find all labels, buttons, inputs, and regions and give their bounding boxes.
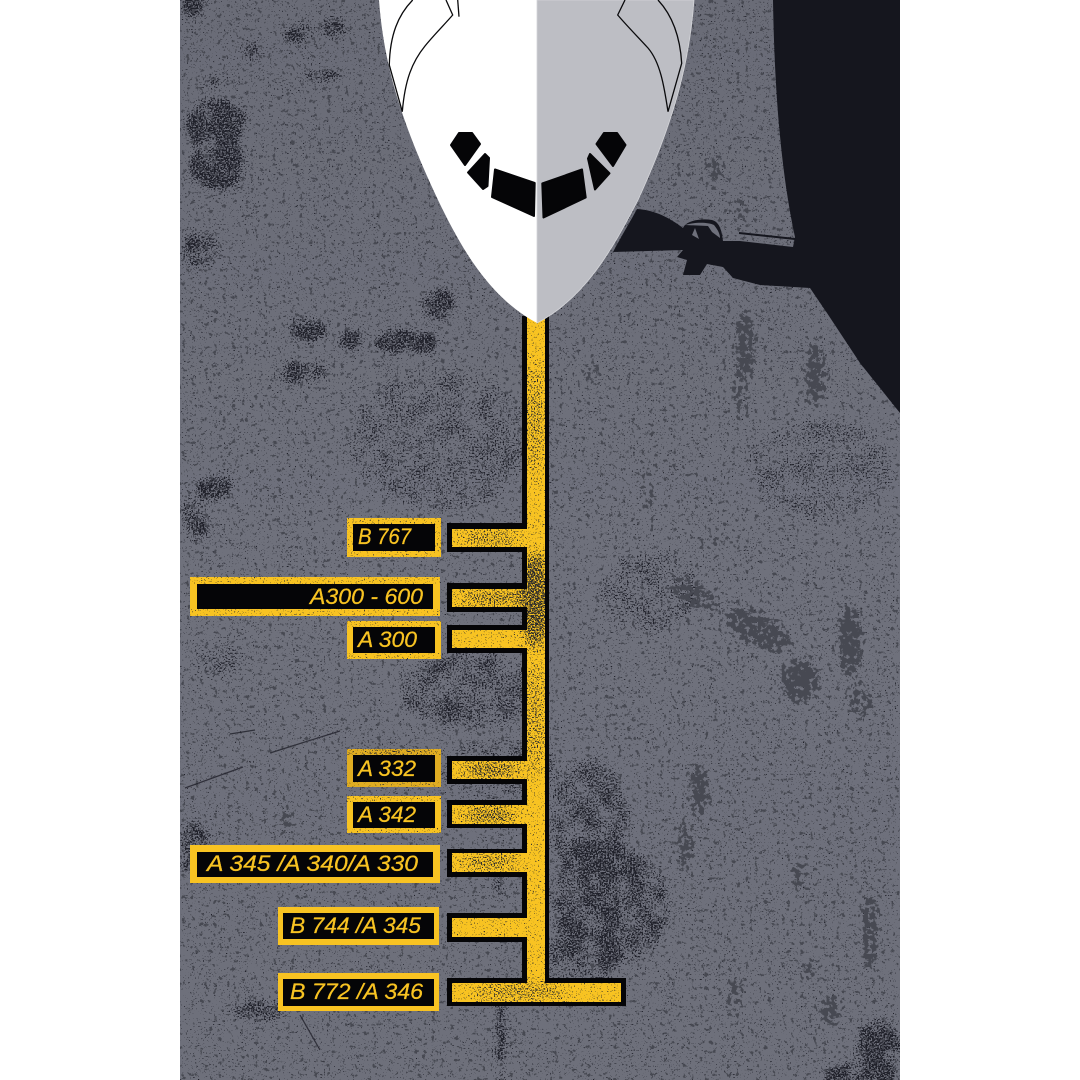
texture: dark grunge speckle (179, 0, 902, 1080)
label: A 300: A 300 (356, 627, 418, 652)
poster: aircraft nose and parking stop lines (180, 0, 900, 1080)
aircraft nose (379, 0, 694, 323)
label: A 342: A 342 (356, 802, 416, 827)
label: B 772 / A 346 (278, 973, 439, 1011)
nose: right outline panel (618, 0, 682, 112)
stop line: yellow centre and branches (452, 316, 621, 1002)
panel: asphalt background (180, 0, 900, 1080)
label: B 767: B 767 (358, 524, 412, 549)
label: A300 - 600: A300 - 600 (308, 584, 424, 609)
texture: gray asphalt stains (283, 154, 877, 1024)
label: A 332: A 332 (356, 756, 416, 781)
label: A 345 / A 340 / A 330 (190, 845, 440, 883)
label: A300 - 600 (190, 577, 440, 616)
cockpit windows: left (451, 133, 535, 216)
label: A 332 (347, 749, 441, 787)
label: A 300 (347, 621, 441, 659)
texture: worn paint on stop line (190, 318, 620, 1002)
label: A 345 / A 340 / A 330: A 345 /A 340/A 330 (205, 851, 419, 876)
label: B 744 / A 345: B 744 /A 345 (290, 913, 422, 938)
label: B 767 (347, 518, 441, 557)
scratches on the asphalt (185, 730, 340, 1050)
cockpit windows: right (542, 133, 626, 218)
label: B 772 / A 346: B 772 /A 346 (290, 979, 424, 1004)
nose: left white half (379, 0, 537, 323)
nose: left outline panel (389, 0, 459, 112)
label: B 744 / A 345 (278, 907, 439, 945)
aircraft shadow (613, 0, 900, 413)
stop line: black outline with branches (447, 316, 626, 1006)
label: A 342 (347, 796, 441, 833)
nose: right gray half (537, 0, 694, 323)
